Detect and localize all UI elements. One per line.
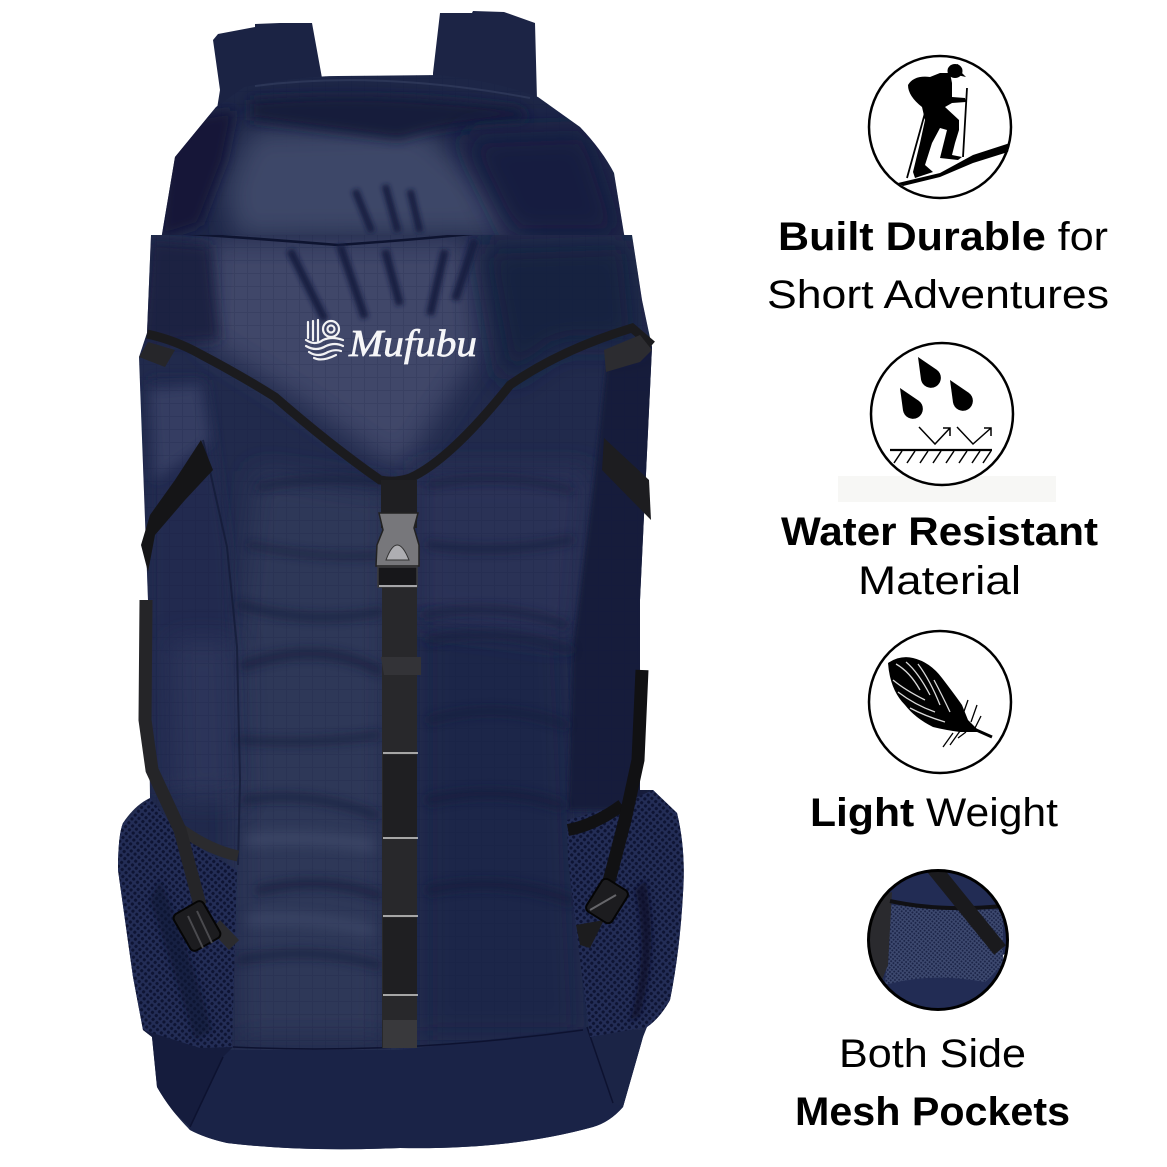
shoulder straps bbox=[213, 11, 537, 115]
dark side panel bbox=[568, 340, 660, 810]
chest buckle bbox=[376, 513, 419, 587]
panel tones bbox=[235, 470, 390, 1040]
logo emblem bbox=[306, 320, 343, 359]
text: light weight: Light Weight bbox=[810, 791, 1058, 835]
text: mesh pockets: Both Side bbox=[839, 1032, 1026, 1076]
main body bbox=[110, 228, 690, 1160]
ripstop grid bbox=[125, 312, 647, 1028]
centre webbing strap bbox=[381, 480, 421, 1048]
icon: hiker bbox=[869, 56, 1011, 198]
text: mesh pockets bbox=[795, 1032, 1070, 1134]
text: built durable: Built Durable for bbox=[778, 215, 1108, 259]
icon: mesh pocket photo bbox=[868, 866, 1012, 1012]
text: water resistant: Material bbox=[858, 559, 1021, 603]
text: water resistant bbox=[781, 510, 1098, 603]
text: mesh pockets: Mesh Pockets bbox=[795, 1090, 1070, 1134]
backpack photo illustration bbox=[110, 11, 690, 1160]
horizontal fabric wrinkles bbox=[240, 479, 570, 965]
feature: light weight bbox=[810, 631, 1058, 835]
side strap adjuster buckles bbox=[172, 877, 630, 953]
icon: rain drops bbox=[871, 343, 1013, 485]
faded backdrop bbox=[838, 476, 1056, 502]
Mufubu logo bbox=[306, 320, 477, 365]
upper side straps bbox=[141, 440, 213, 572]
V strap bbox=[147, 328, 652, 481]
top lid bbox=[162, 75, 624, 235]
black webbing straps bbox=[139, 328, 652, 905]
feature: water resistant bbox=[781, 343, 1098, 603]
pocket binding bbox=[182, 830, 238, 856]
side mesh pockets bbox=[118, 790, 684, 1048]
feature: mesh pockets bbox=[795, 866, 1070, 1134]
dark flap right and left bbox=[480, 240, 640, 385]
long side straps bbox=[145, 600, 200, 905]
fabric highlights lower left bbox=[250, 838, 370, 930]
seams and flap wrinkles bbox=[203, 440, 240, 865]
icon: feather bbox=[869, 631, 1011, 773]
bottom panel bbox=[188, 1028, 642, 1150]
text: built durable bbox=[767, 215, 1109, 317]
feature: built durable bbox=[767, 56, 1109, 317]
text: built durable: Short Adventures bbox=[767, 273, 1109, 317]
text: water resistant: Water Resistant bbox=[781, 510, 1098, 554]
logo wordmark: Mufubu bbox=[348, 323, 477, 365]
upper panel highlight bbox=[205, 240, 480, 470]
